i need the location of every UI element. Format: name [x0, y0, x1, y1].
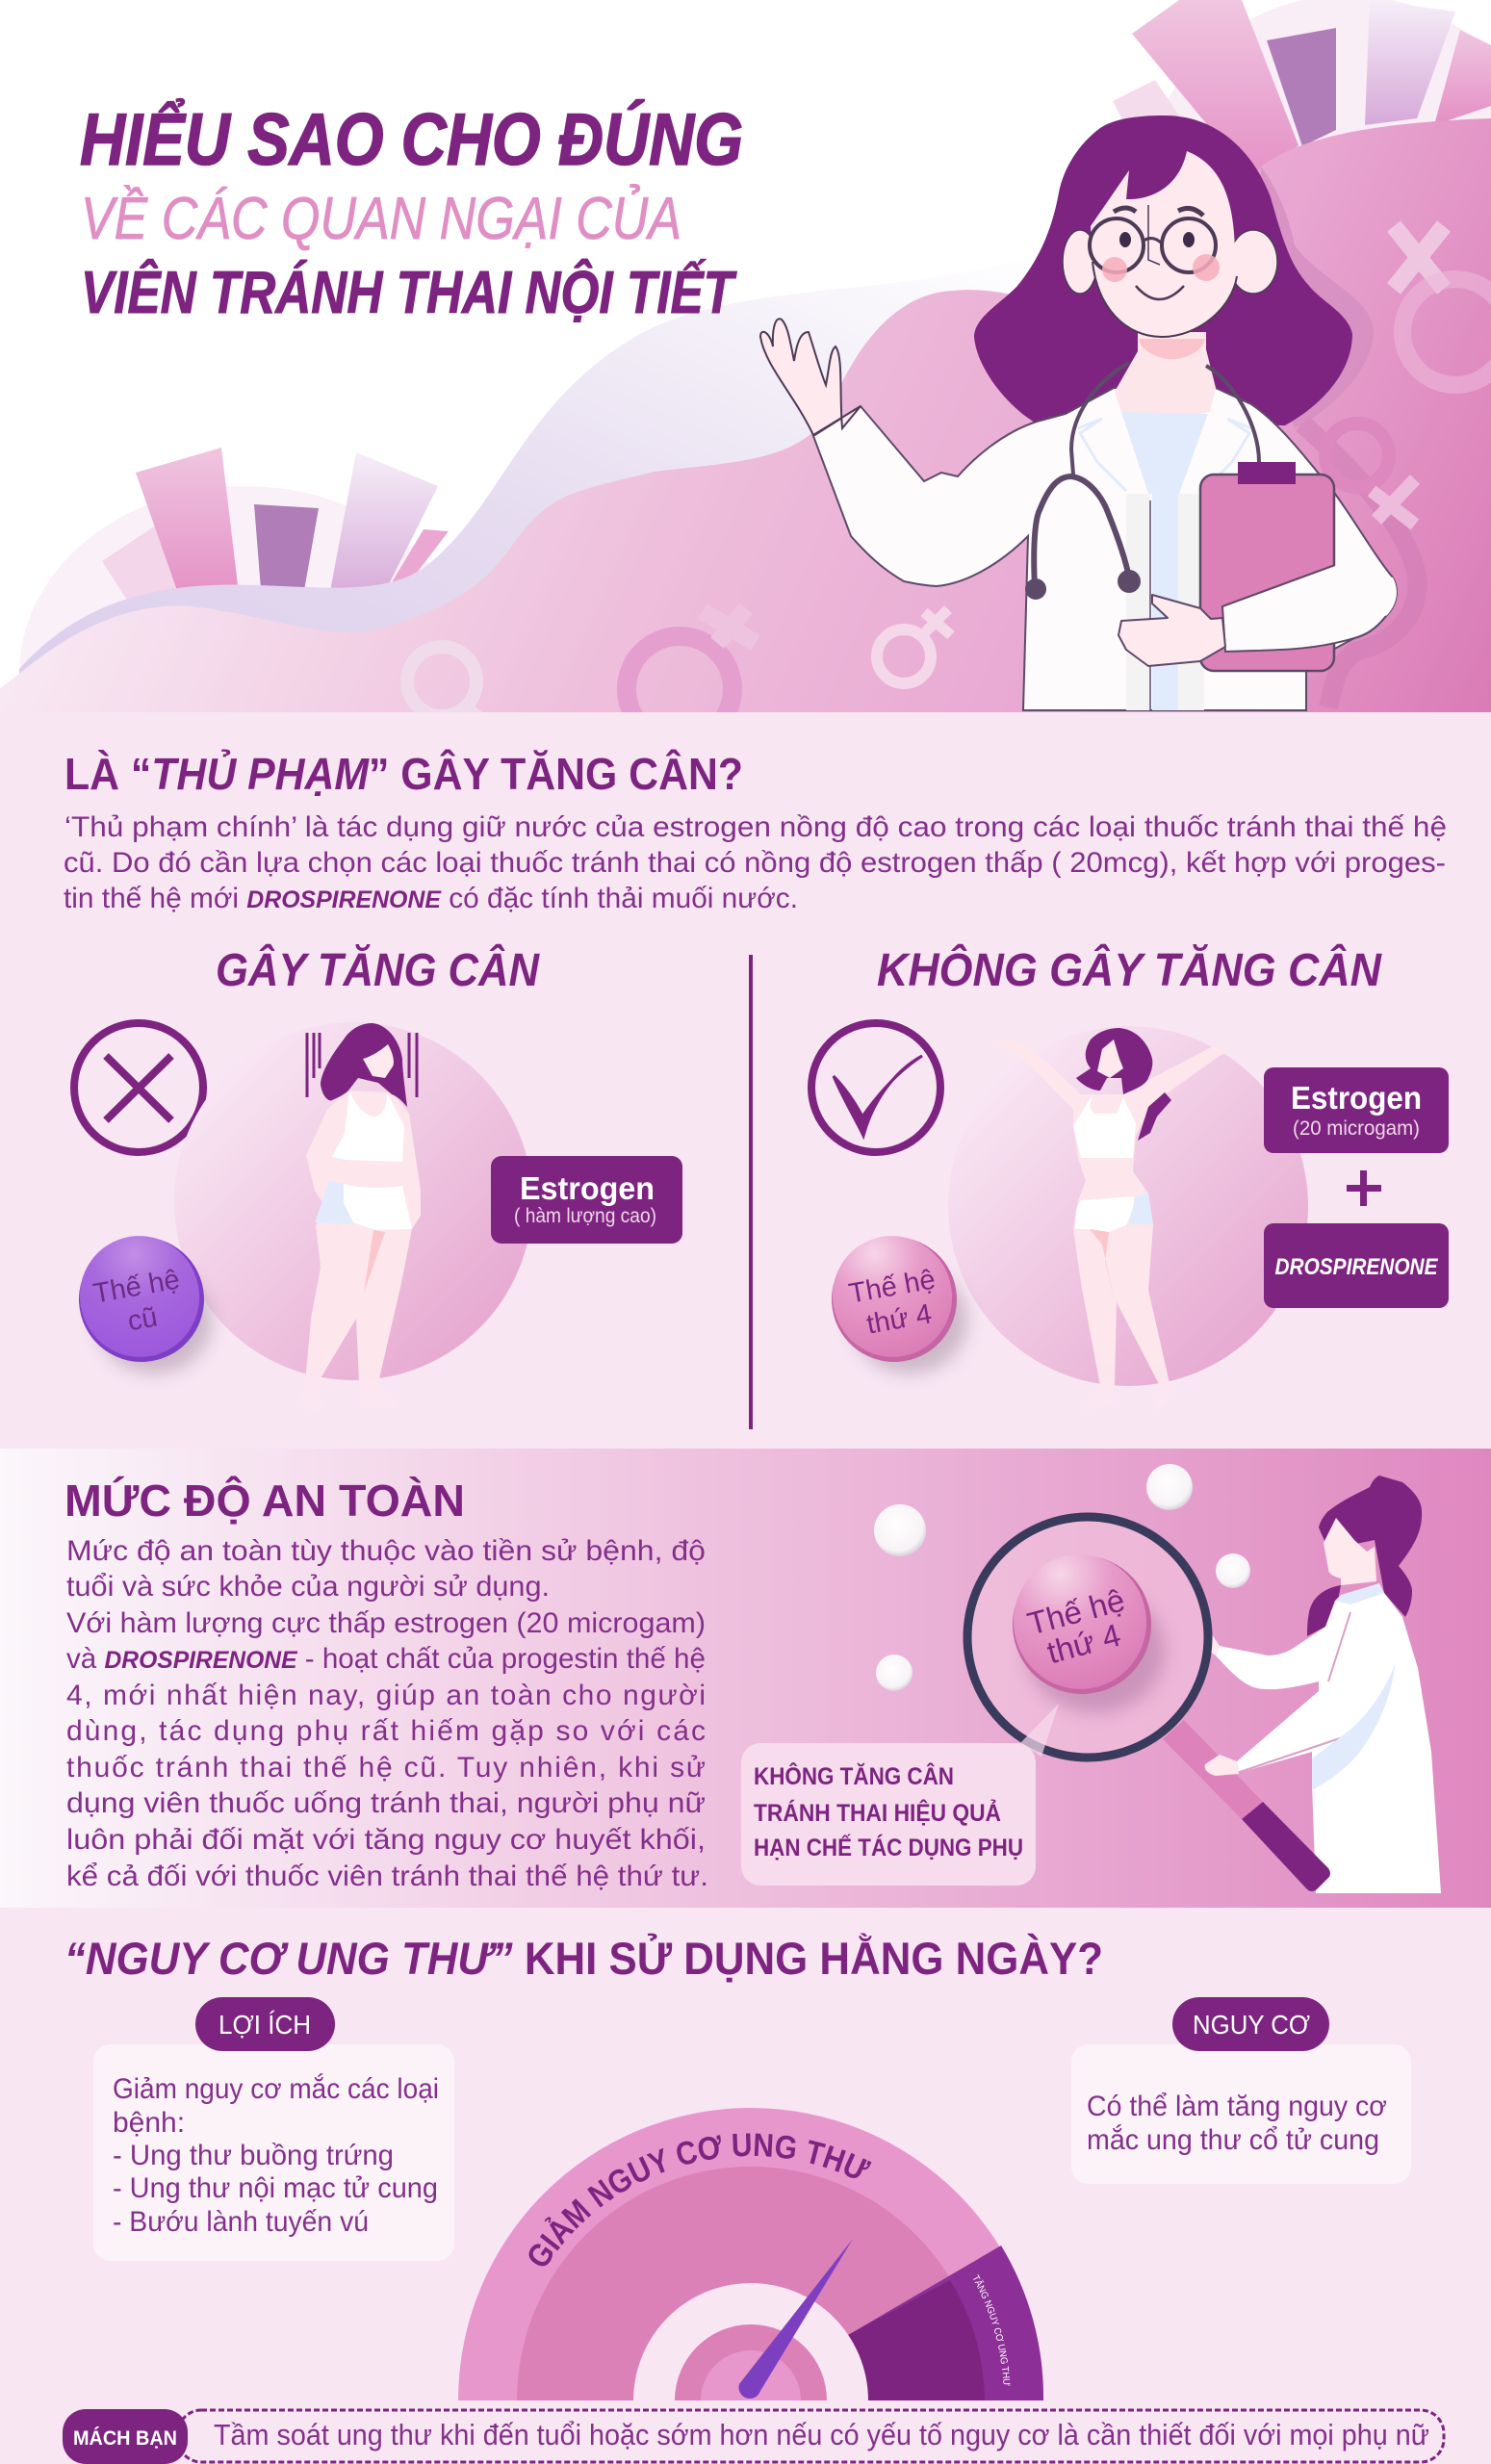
subheading: no weight gain: KHÔNG GÂY TĂNG CÂN	[877, 943, 1382, 996]
box: benefits: - Ung thư buồng trứng	[113, 2140, 394, 2171]
text block: safety explanation: 4, mới nhất hiện nay, giúp an toàn cho người	[66, 1680, 706, 1711]
holding hand	[1118, 595, 1225, 666]
coat fold	[1237, 1612, 1350, 1773]
box: benefits: bệnh:	[113, 2107, 185, 2139]
callout: estrogen 20 microgram	[1264, 1067, 1449, 1153]
neck shadow	[1139, 339, 1205, 359]
gender symbols	[407, 226, 1491, 742]
callout: benefits	[741, 1704, 1059, 1886]
badge: risks: NGUY CƠ	[1193, 2010, 1310, 2040]
text block: safety explanation: Mức độ an toàn tùy thuộc vào tiền sử bệnh, độ	[66, 1535, 706, 1567]
advice bar: MÁCH BẠN	[73, 2427, 177, 2450]
callout: estrogen high dose	[491, 1156, 682, 1244]
text block: safety explanation: dụng viên thuốc uống tránh thai, người phụ nữ	[66, 1787, 706, 1819]
ponytail lower	[1307, 1585, 1341, 1636]
title	[80, 98, 743, 326]
icon: cross in circle	[74, 1023, 203, 1152]
hero panel	[0, 0, 1491, 712]
magnifier handle	[1163, 1720, 1330, 1891]
decorative fan: left	[19, 448, 449, 668]
badge: benefits: LỢI ÍCH	[219, 2010, 311, 2040]
text block: weight gain explanation	[64, 811, 1447, 914]
pill: fourth generation: Thế hệ	[847, 1264, 938, 1310]
callout: benefits: HẠN CHẾ TÁC DỤNG PHỤ	[754, 1834, 1023, 1861]
gauge label: reduced cancer risk: GIẢM NGUY CƠ UNG THƯ	[529, 2133, 872, 2266]
text block: safety explanation: luôn phải đối mặt với tăng nguy cơ huyết khối,	[66, 1824, 706, 1856]
background circle right	[948, 1026, 1308, 1386]
heading: cancer risk: “NGUY CƠ UNG THƯ” KHI SỬ DỤNG HẰNG NGÀY?	[64, 1933, 1103, 1984]
neck	[1115, 332, 1216, 416]
text block: weight gain explanation: ‘Thủ phạm chính’ là tác dụng giữ nước của estrogen nồng độ cao trong các loại thuốc tránh thai thế hệ	[64, 811, 1447, 843]
forearm	[1222, 565, 1397, 652]
advice bar: Tầm soát ung thư khi đến tuổi hoặc sớm hơn nếu có yếu tố nguy cơ là cần thiết đối với mọi phụ nữ	[214, 2418, 1429, 2451]
doctor character	[760, 116, 1397, 710]
pill: old generation: Thế hệ	[91, 1264, 182, 1310]
text block: safety explanation: Với hàm lượng cực thấp estrogen (20 microgam)	[66, 1607, 706, 1639]
wave: lavender	[19, 287, 903, 674]
face	[1091, 151, 1237, 337]
gauge: increased risk segment	[848, 2246, 1043, 2400]
callout: drospirenone	[1264, 1223, 1449, 1308]
wave: pink	[0, 118, 1491, 712]
hair	[1319, 1476, 1422, 1617]
hair	[974, 116, 1352, 425]
text block: safety explanation: tuổi và sức khỏe của người sử dụng.	[66, 1571, 550, 1603]
title line 1: HIỂU SAO CHO ĐÚNG	[80, 98, 743, 181]
decorative fan: top right	[1113, 0, 1491, 171]
white bubbles	[874, 1464, 1250, 1691]
text block: safety explanation	[66, 1535, 708, 1892]
callout: drospirenone: DROSPIRENONE	[1274, 1254, 1438, 1280]
background circle left	[174, 1022, 532, 1380]
text block: safety explanation: dùng, tác dụng phụ rất hiếm gặp so với các	[66, 1715, 706, 1747]
callout: estrogen 20 microgram: Estrogen	[1291, 1080, 1422, 1116]
clipboard clip	[1238, 462, 1296, 484]
coat panels	[1126, 494, 1204, 710]
icon: check in circle	[811, 1023, 940, 1152]
box: benefits: - Ung thư nội mạc tử cung	[113, 2172, 438, 2204]
gauge chart	[458, 2108, 1043, 2400]
face	[1324, 1518, 1376, 1585]
pill: old generation	[64, 1222, 219, 1376]
text block: weight gain explanation: cũ. Do đó cần lựa chọn các loại thuốc tránh thai có nồng độ estrogen thấp ( 20mcg), kết hợp với proges-	[64, 847, 1446, 879]
title line 2: VỀ CÁC QUAN NGẠI CỦA	[81, 185, 681, 252]
badge: risks	[1172, 1997, 1329, 2051]
collar lapels	[1078, 419, 1251, 491]
pill: fourth generation	[817, 1222, 971, 1376]
gauge needle	[738, 2239, 853, 2399]
doctor hands and sleeve cuff	[1205, 1629, 1239, 1776]
box: benefits	[93, 2044, 454, 2261]
stethoscope	[1025, 363, 1259, 600]
box: risks	[1071, 2044, 1411, 2184]
magnifier lens	[967, 1517, 1208, 1758]
advice bar	[63, 2409, 1444, 2464]
coat shadow	[1312, 1662, 1396, 1790]
box: risks: mắc ung thư cổ tử cung	[1087, 2124, 1379, 2156]
callout: estrogen high dose: Estrogen	[520, 1170, 655, 1206]
undershirt	[1121, 412, 1208, 710]
figure: slim woman with raised arms	[991, 1028, 1229, 1415]
chin line	[1093, 262, 1237, 337]
figure: woman with heavier body	[298, 1023, 421, 1412]
smile	[1136, 286, 1184, 299]
raised hand	[760, 319, 861, 435]
badge: benefits	[195, 1997, 335, 2051]
coat	[813, 388, 1397, 710]
cheeks	[1102, 254, 1220, 282]
callout: estrogen high dose: ( hàm lượng cao)	[514, 1205, 656, 1227]
text block: safety explanation: kể cả đối với thuốc viên tránh thai thế hệ thứ tư.	[66, 1861, 708, 1892]
pill: fourth generation: thứ 4	[864, 1298, 934, 1341]
magnifier lens: Thế hệ	[1023, 1581, 1128, 1642]
panel: cancer risk	[63, 1933, 1446, 2464]
divider	[749, 955, 753, 1429]
pill: old generation: cũ	[125, 1302, 160, 1337]
callout: estrogen 20 microgram: (20 microgam)	[1293, 1117, 1420, 1140]
collar	[1335, 1583, 1384, 1604]
hair shadow	[1251, 167, 1374, 428]
icon: plus	[1347, 1170, 1381, 1206]
ears	[1063, 230, 1277, 294]
box: risks: Có thể làm tăng nguy cơ	[1087, 2091, 1387, 2122]
text block: safety explanation: thuốc tránh thai thế hệ cũ. Tuy nhiên, khi sử	[66, 1752, 706, 1784]
eyes and glasses	[1090, 205, 1216, 272]
panel: weight gain	[64, 749, 1449, 1429]
coat	[1216, 1593, 1441, 1893]
box: benefits: Giảm nguy cơ mắc các loại	[113, 2073, 439, 2105]
callout: benefits: KHÔNG TĂNG CÂN	[754, 1761, 954, 1790]
doctor seen from behind	[1216, 1476, 1441, 1893]
magnifier lens: thứ 4	[1043, 1617, 1124, 1670]
clipboard	[1200, 475, 1334, 671]
box: benefits: - Bướu lành tuyến vú	[113, 2206, 369, 2238]
bangs	[1126, 151, 1187, 199]
heading: weight gain: LÀ “THỦ PHẠM” GÂY TĂNG CÂN?	[64, 749, 743, 799]
callout: benefits: TRÁNH THAI HIỆU QUẢ	[754, 1798, 1001, 1827]
title line 3: VIÊN TRÁNH THAI NỘI TIẾT	[81, 260, 737, 326]
subheading: causes weight gain: GÂY TĂNG CÂN	[216, 943, 540, 996]
panel: safety level	[64, 1464, 1441, 1893]
heading: safety level: MỨC ĐỘ AN TOÀN	[64, 1476, 465, 1526]
text block: weight gain explanation: tin thế hệ mới DROSPIRENONE có đặc tính thải muối nước.	[64, 883, 798, 914]
gauge label: increased cancer risk: TĂNG NGUY CƠ UNG THƯ	[973, 2273, 1011, 2385]
text block: safety explanation: và DROSPIRENONE - hoạt chất của progestin thế hệ	[66, 1643, 706, 1675]
